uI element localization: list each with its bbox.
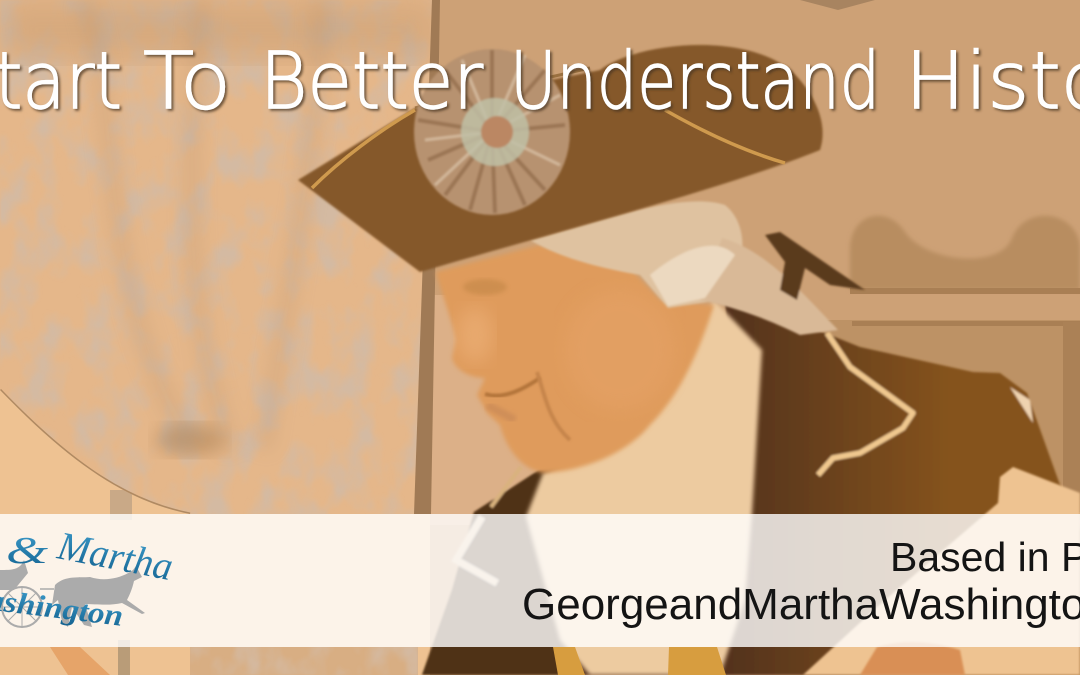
logo: George and Martha Washington: Martha xyxy=(53,522,177,589)
man: shirt and cravat xyxy=(526,300,762,675)
man: coat xyxy=(422,297,1080,675)
wall panel moulding xyxy=(850,216,1080,512)
arm at lower left xyxy=(50,647,110,675)
title: Better xyxy=(260,37,483,127)
logo lettering: & xyxy=(6,530,49,572)
white band xyxy=(0,514,1080,647)
carriage and horse silhouette xyxy=(0,560,145,627)
logo: George and Martha Washington xyxy=(0,522,177,633)
rosette on hat xyxy=(414,49,570,215)
hand xyxy=(860,642,965,675)
title: To xyxy=(143,37,231,127)
shirt gold waistcoat left xyxy=(553,647,585,675)
white cuff xyxy=(803,467,1080,675)
curtain below the band xyxy=(190,647,418,675)
window post xyxy=(110,490,132,675)
curtain xyxy=(0,0,440,520)
face details xyxy=(457,279,675,440)
shirt gold waistcoat xyxy=(668,647,726,675)
man: face xyxy=(436,245,714,473)
window frame xyxy=(414,0,440,514)
wig xyxy=(530,201,865,335)
title: Understand xyxy=(510,37,880,127)
tricorn hat xyxy=(298,45,823,272)
title xyxy=(0,37,1080,127)
